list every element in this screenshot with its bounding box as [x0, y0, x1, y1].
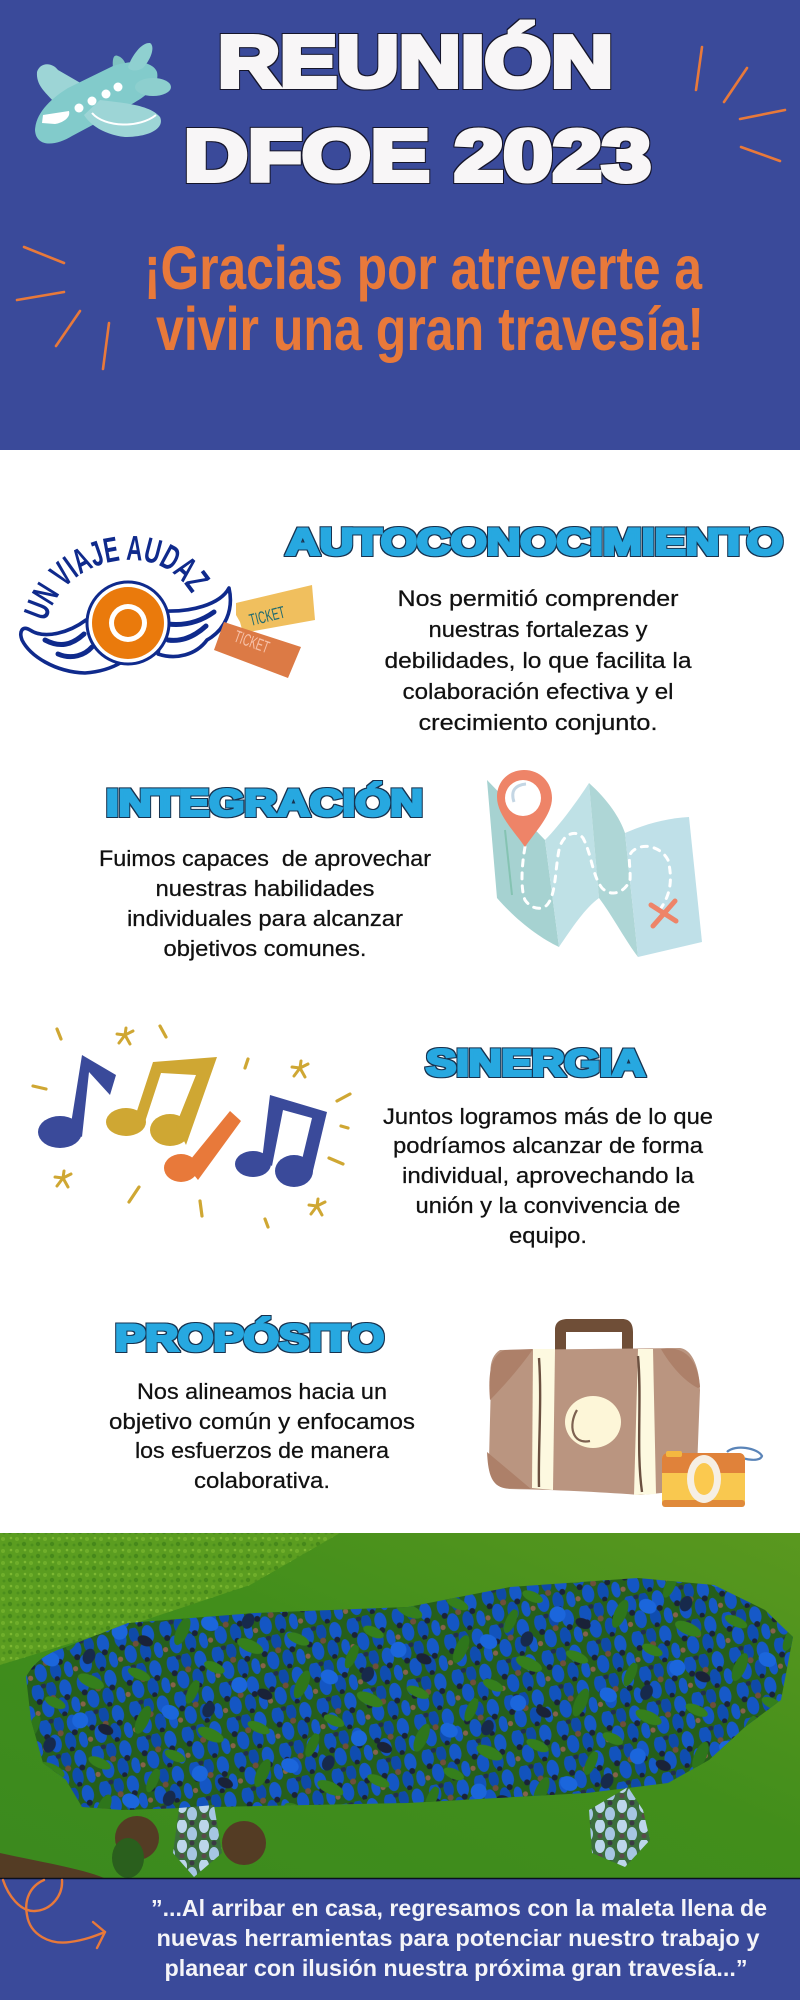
text: closing quote: planear con ilusión nuestra próxima gran travesía...”: [164, 1955, 747, 1981]
heading: sinergia: SINERGIA: [426, 1042, 645, 1084]
text: sinergia body: Juntos logramos más de lo que: [383, 1104, 713, 1129]
icon: map: [487, 770, 702, 957]
icon: orange ticket: TICKET: [232, 627, 272, 657]
panel: sinergia: [33, 1026, 713, 1248]
rays: left: [17, 247, 109, 369]
text: integracion body: Fuimos capaces de aprovechar: [99, 846, 431, 871]
icon: orange music note: [164, 1111, 241, 1182]
rays: top right: [696, 47, 785, 161]
crowd irregular overlay: [26, 1578, 793, 1810]
icon: yellow ticket: [236, 585, 315, 633]
crowd right leg: [589, 1787, 650, 1867]
panel: autoconocimiento: [18, 522, 784, 735]
logo wing feathers: [45, 612, 214, 657]
sparkle dashes: [33, 1026, 350, 1227]
text: sinergia body: unión y la convivencia de: [416, 1193, 680, 1218]
text: sinergia body: equipo.: [509, 1223, 587, 1248]
icon: blue music note: [38, 1055, 116, 1148]
icon: orange ticket: [214, 622, 301, 678]
text: proposito body: los esfuerzos de manera: [135, 1438, 390, 1463]
subtitle: [144, 234, 704, 363]
heading: proposito: PROPÓSITO: [115, 1316, 384, 1358]
icon: suitcase: [487, 1319, 700, 1495]
sparkle stars: [55, 1028, 325, 1215]
title: Reunión: REUNIÓN: [218, 22, 613, 102]
icon: camera: [662, 1448, 762, 1507]
icon: blue double note: [235, 1095, 327, 1187]
text: autoconocimiento body: debilidades, lo que facilita la: [384, 648, 692, 673]
crowd body: [26, 1578, 793, 1810]
text: closing quote: nuevas herramientas para potenciar nuestro trabajo y: [156, 1925, 760, 1951]
icon: looping arrow: [3, 1880, 105, 1948]
title: DFOE 2023: DFOE 2023: [184, 116, 651, 196]
panel: proposito: [109, 1316, 762, 1507]
text: sinergia body: podríamos alcanzar de forma: [393, 1133, 704, 1158]
icon: gold music notes: [106, 1057, 217, 1146]
logo: un viaje audaz: [18, 536, 232, 675]
text: closing quote: ”...Al arribar en casa, regresamos con la maleta llena de: [151, 1895, 767, 1921]
heading: autoconocimiento: AUTOCONOCIMIENTO: [286, 522, 783, 562]
text: proposito body: colaborativa.: [194, 1468, 330, 1493]
photo: team forming an airplane shape on grass: [0, 1533, 800, 1878]
text: autoconocimiento body: crecimiento conjunto.: [418, 710, 658, 735]
logo wheel: [87, 582, 169, 664]
text: integracion body: objetivos comunes.: [164, 936, 366, 961]
tree shadow: [112, 1838, 144, 1878]
heading: integracion: INTEGRACIÓN: [106, 782, 423, 824]
text: integracion body: individuales para alcanzar: [127, 906, 403, 931]
icon: yellow ticket: TICKET: [247, 603, 287, 630]
text: autoconocimiento body: [384, 586, 692, 735]
panel: closing quote: [0, 1878, 800, 2000]
text: closing quote: [151, 1895, 767, 1981]
text: sinergia body: [383, 1104, 713, 1248]
hedge: [0, 1533, 340, 1665]
text: autoconocimiento body: nuestras fortalezas y: [428, 617, 648, 642]
text: autoconocimiento body: colaboración efectiva y el: [402, 679, 674, 704]
text: proposito body: Nos alineamos hacia un: [137, 1379, 387, 1404]
text: autoconocimiento body: Nos permitió comprender: [398, 586, 678, 611]
crowd left leg: [173, 1805, 222, 1877]
text: sinergia body: individual, aprovechando la: [402, 1163, 695, 1188]
logo wings: [21, 588, 230, 673]
dark soil patches: [0, 1816, 266, 1878]
panel: header banner: [0, 0, 800, 450]
text: proposito body: objetivo común y enfocamos: [109, 1409, 415, 1434]
icon: airplane: [35, 43, 171, 144]
text: integracion body: [99, 846, 431, 961]
logo text: UN VIAJE AUDAZ: [24, 536, 210, 618]
text: proposito body: [109, 1379, 415, 1493]
panel: integracion: [99, 770, 702, 961]
text: integracion body: nuestras habilidades: [156, 876, 374, 901]
